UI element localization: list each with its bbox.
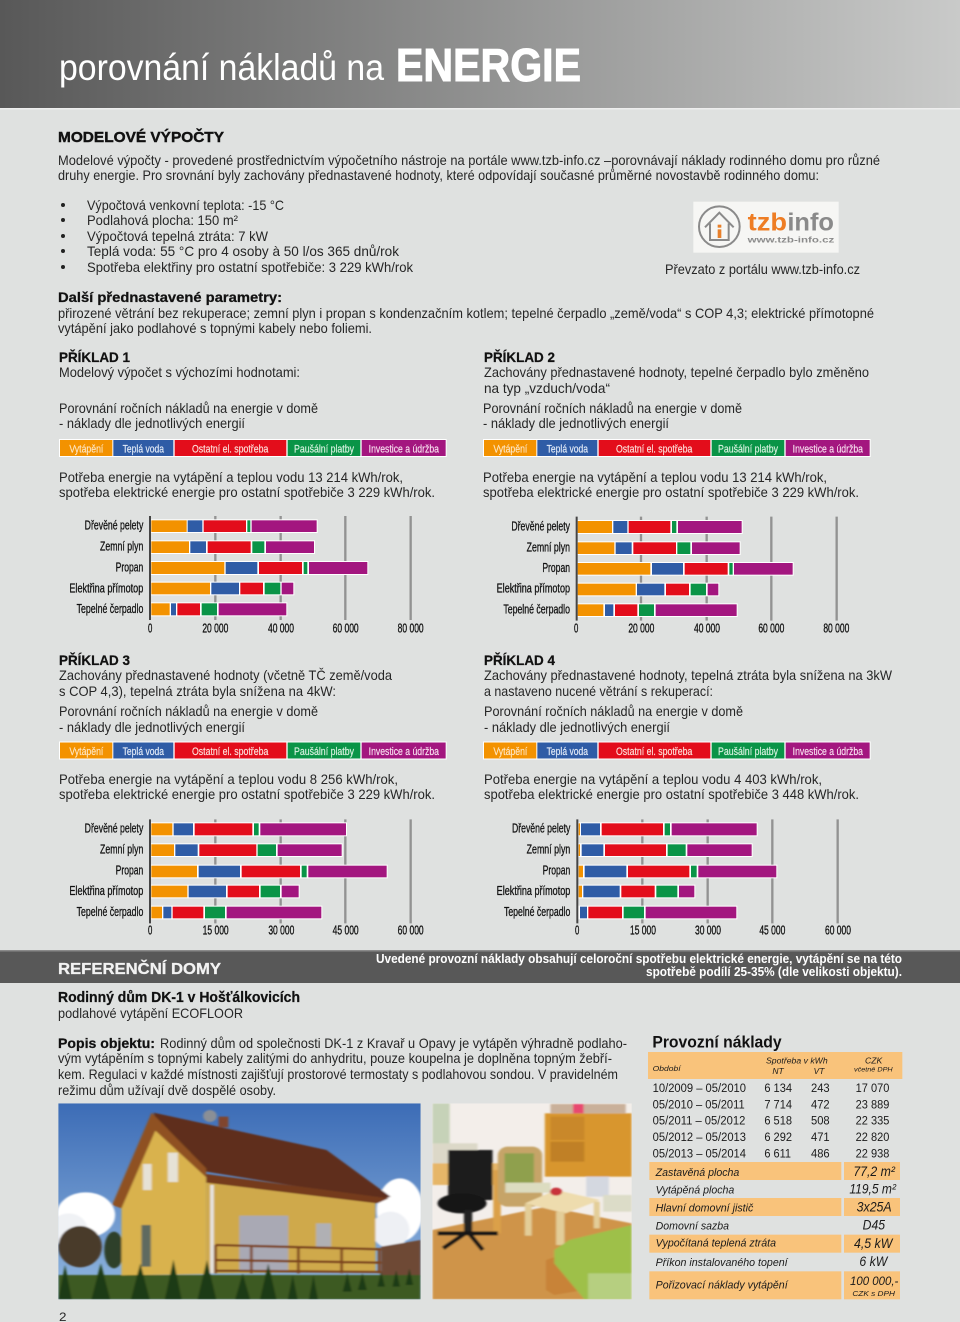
legend example 2 [483, 439, 871, 457]
example 3 text [59, 651, 392, 735]
chart: example 4 [497, 819, 851, 937]
example 2 energy demand: Potřeba energie na vytápění a teplou vodu 13 214 kWh/rok, [483, 469, 827, 485]
table rows: periods: 486 [811, 1147, 830, 1161]
table: house parameters: Vytápěná plocha [656, 1185, 734, 1197]
table rows: periods: 22 938 [856, 1147, 889, 1161]
example 3 energy demand: spotřeba elektrické energie pro ostatní spotřebiče 3 229 kWh/rok. [59, 786, 435, 802]
example 4 energy demand: Potřeba energie na vytápění a teplou vodu 4 403 kWh/rok, [484, 771, 822, 787]
bar: Propan [151, 865, 388, 878]
house title [58, 990, 300, 1021]
axis values: 30 000 [695, 923, 721, 937]
logo: tzb-info: info [787, 209, 834, 237]
table rows: periods: 472 [811, 1097, 830, 1111]
heading: modelové výpočty: MODELOVÉ VÝPOČTY [58, 128, 224, 146]
object description: Rodinný dům od společnosti DK-1 z Kravař u Opavy je vytápěn výhradně podlaho- [160, 1035, 627, 1051]
category labels: Tepelné čerpadlo [503, 601, 570, 616]
example 1 energy demand [59, 469, 435, 500]
object description: režimu dům užívají dvě dospělé osoby. [58, 1082, 276, 1098]
further parameters: vytápění jako podlahové s topnými kabely nebo foliemi. [58, 320, 372, 336]
example 4 text: Porovnání ročních nákladů na energie v domě [484, 703, 743, 719]
legend example 2: Paušální platby [718, 444, 778, 456]
legend example 4: Vytápění [493, 746, 527, 758]
axis values: 60 000 [398, 923, 424, 937]
logo: tzb-info [693, 202, 839, 253]
category labels: Zemní plyn [527, 539, 570, 554]
axis values: 30 000 [268, 923, 294, 937]
table rows: periods: 508 [811, 1114, 830, 1128]
category labels: Dřevěné pelety [85, 821, 144, 836]
table: house parameters: Pořizovací náklady vytápění [656, 1280, 789, 1292]
object description [58, 1035, 627, 1098]
table rows: periods: 22 335 [856, 1114, 889, 1128]
object description: kem. Regulaci v každé místnosti zajišťují prostorové termostaty s podlahovou sondou. V pravidelném [58, 1066, 618, 1082]
example 3 energy demand: Potřeba energie na vytápění a teplou vodu 8 256 kWh/rok, [59, 771, 398, 787]
header banner [0, 0, 960, 110]
example 1 text: Modelový výpočet s výchozími hodnotami: [59, 364, 300, 380]
note on operating costs: Uvedené provozní náklady obsahují celoroční spotřebu elektrické energie, vytápění se na této [376, 952, 902, 966]
legend example 1: Investice a údržba [369, 444, 440, 456]
table header: CZK [865, 1055, 883, 1065]
table rows: periods: 10/2009 – 05/2010 [653, 1081, 746, 1095]
axis values: 60 000 [758, 622, 784, 636]
bullet list of parameters: Podlahová plocha: 150 m² [87, 212, 238, 228]
example 2 text: na typ „vzduch/voda“ [484, 380, 610, 396]
table rows: periods: 6 518 [764, 1114, 792, 1128]
axis values: 15 000 [203, 923, 229, 937]
legend example 1: Vytápění [69, 444, 103, 456]
chart: example 2 [497, 517, 849, 636]
table header: včetně DPH [854, 1067, 893, 1074]
table: house parameters: 77,2 m² [853, 1164, 895, 1179]
legend example 2: Ostatní el. spotřeba [616, 444, 693, 456]
axis values: 20 000 [628, 622, 654, 636]
category labels: Dřevěné pelety [512, 821, 571, 836]
example 1 text: PŘÍKLAD 1 [59, 348, 130, 365]
photo: house exterior [50, 1103, 423, 1299]
band: reference houses [0, 950, 960, 983]
example 4 text [484, 651, 893, 735]
table rows: periods: 17 070 [856, 1081, 889, 1095]
bullet list of parameters: Výpočtová venkovní teplota: -15 °C [87, 197, 284, 213]
bar: Elektřina přímotop [151, 885, 300, 898]
category labels [69, 821, 144, 919]
logo: tzb-info: www.tzb-info.cz [746, 234, 834, 244]
category labels: Propan [116, 862, 143, 877]
example 4 text: a nastaveno nucené větrání s rekuperací: [484, 683, 713, 699]
table rows: periods: 6 292 [764, 1130, 792, 1144]
table: house parameters: 3x25A [857, 1199, 892, 1214]
table: house parameters: 100 000,- [850, 1274, 898, 1288]
example 4 energy demand [484, 771, 859, 802]
example 3 text: PŘÍKLAD 3 [59, 651, 130, 668]
table rows: periods: 05/2010 – 05/2011 [653, 1097, 745, 1111]
table: house parameters: Domovní sazba [656, 1220, 729, 1232]
table header: NT [772, 1066, 785, 1076]
axis values [148, 923, 424, 937]
further parameters: přirozené větrání bez rekuperace; zemní plyn i propan s kondenzačním kotlem; tepelné čerpadlo „země/voda“ s COP 4,3; elektrické přímotopné [58, 305, 874, 321]
category labels: Zemní plyn [100, 841, 143, 856]
further parameters [58, 289, 874, 336]
legend example 3: Investice a údržba [369, 746, 440, 758]
legend example 1: Paušální platby [294, 444, 354, 456]
category labels: Tepelné čerpadlo [504, 904, 570, 919]
category labels: Elektřina přímotop [497, 883, 570, 898]
example 2 text: - náklady dle jednotlivých energií [483, 415, 669, 431]
table header: VT [814, 1066, 825, 1076]
legend example 3: Vytápění [69, 746, 103, 758]
axis values: 40 000 [268, 621, 294, 635]
bar: Elektřina přímotop [577, 583, 719, 596]
legend example 4: Teplá voda [547, 746, 589, 758]
example 1 energy demand: Potřeba energie na vytápění a teplou vodu 13 214 kWh/rok, [59, 469, 403, 485]
table: house parameters: Vypočítaná teplená ztráta [656, 1238, 776, 1250]
table rows: periods: 6 134 [764, 1081, 792, 1095]
bar: Propan [578, 865, 777, 878]
example 2 text: PŘÍKLAD 2 [484, 348, 555, 365]
table title: Provozní náklady [652, 1032, 782, 1051]
category labels: Zemní plyn [527, 841, 570, 856]
note on operating costs: spotřebě podílí 25-35% (dle velikosti objektu). [646, 965, 902, 979]
table: house parameters: D45 [863, 1217, 885, 1232]
category labels: Elektřina přímotop [69, 883, 143, 898]
axis values: 80 000 [823, 622, 849, 636]
logo: tzb-info: tzb [748, 209, 787, 237]
bar: Propan [577, 562, 794, 576]
panel: operating costs table [648, 1032, 902, 1299]
example 1 text [59, 348, 318, 431]
axis values: 20 000 [202, 621, 228, 635]
table rows: periods: 22 820 [856, 1130, 889, 1144]
category labels: Propan [116, 560, 143, 575]
table rows: periods: 243 [811, 1081, 830, 1095]
legend example 4: Ostatní el. spotřeba [616, 746, 693, 758]
category labels: Tepelné čerpadlo [77, 601, 143, 616]
category labels: Elektřina přímotop [497, 581, 570, 596]
table: house parameters: CZK s DPH [852, 1289, 896, 1298]
bullet list of parameters: Teplá voda: 55 °C pro 4 osoby à 50 l/os 365 dnů/rok [87, 243, 400, 259]
example 1 energy demand: spotřeba elektrické energie pro ostatní spotřebiče 3 229 kWh/rok. [59, 484, 435, 500]
table: house parameters: Příkon instalovaného topení [656, 1257, 789, 1269]
bar: Zemní plyn [151, 843, 343, 857]
category labels [69, 518, 144, 616]
legend example 4 [483, 741, 871, 759]
example 1 text: Porovnání ročních nákladů na energie v domě [59, 400, 318, 416]
intro text [58, 152, 880, 183]
axis values [574, 622, 849, 636]
bar: Dřevěné pelety [577, 520, 743, 534]
intro text: druhy energie. Pro srovnání byly zachovány přednastavené hodnoty, které odpovídají současné průměrné novostavbě rodinného domu: [58, 167, 819, 183]
example 2 text: Zachovány přednastavené hodnoty, tepelné čerpadlo bylo změněno [484, 364, 869, 380]
table: house parameters: 119,5 m² [849, 1182, 896, 1197]
table rows: periods: 23 889 [856, 1097, 889, 1111]
axis values: 0 [574, 622, 578, 636]
object description: vým vytápěním s topnými kabely zalitými do anhydritu, pouze koupelna je doplněna topným žebří- [58, 1050, 612, 1066]
axis values: 60 000 [825, 923, 851, 937]
category labels: Tepelné čerpadlo [77, 904, 143, 919]
bar: Elektřina přímotop [151, 582, 294, 595]
example 2 energy demand: spotřeba elektrické energie pro ostatní spotřebiče 3 229 kWh/rok. [483, 484, 859, 500]
table rows: periods: 6 611 [764, 1147, 791, 1161]
logo caption: Převzato z portálu www.tzb-info.cz [665, 261, 860, 277]
example 2 energy demand [483, 469, 859, 500]
legend example 2: Teplá voda [547, 444, 589, 456]
example 3 text: s COP 4,3), tepelná ztráta byla snížena na 4kW: [59, 683, 336, 699]
table header: Spotřeba v kWh [766, 1055, 828, 1065]
legend example 1: Ostatní el. spotřeba [192, 444, 269, 456]
legend example 1: Teplá voda [123, 444, 165, 456]
category labels: Dřevěné pelety [511, 518, 570, 533]
bar: Zemní plyn [577, 541, 741, 555]
legend example 2: Investice a údržba [793, 444, 864, 456]
bar: Dřevěné pelety [151, 822, 347, 836]
category labels: Propan [542, 560, 570, 575]
example 4 text: - náklady dle jednotlivých energií [484, 719, 670, 735]
object description: Popis objektu: [58, 1035, 155, 1051]
note on operating costs [376, 952, 902, 979]
table: house parameters: 4,5 kW [854, 1236, 893, 1251]
axis values: 0 [148, 621, 152, 635]
table: house parameters: 6 kW [859, 1254, 888, 1269]
table: house parameters [649, 1162, 900, 1299]
axis values: 0 [148, 923, 152, 937]
axis values: 45 000 [333, 923, 359, 937]
legend example 3: Teplá voda [123, 746, 165, 758]
category labels: Zemní plyn [100, 539, 143, 554]
legend example 4: Paušální platby [718, 746, 778, 758]
photo: room interior [432, 1103, 632, 1299]
category labels: Propan [543, 862, 570, 877]
table: house parameters: Hlavní domovní jistič [656, 1202, 754, 1214]
bar: Tepelné čerpadlo [577, 603, 738, 617]
axis values: 40 000 [694, 622, 720, 636]
axis values: 15 000 [630, 923, 656, 937]
chart: example 1 [69, 516, 424, 635]
house title: Rodinný dům DK-1 v Hošťálkovicích [58, 990, 300, 1006]
table: house parameters: Zastavěná plocha [655, 1167, 739, 1179]
category labels: Dřevěné pelety [85, 518, 144, 533]
bar: Elektřina přímotop [578, 885, 695, 898]
axis values [575, 923, 851, 937]
example 4 text: Zachovány přednastavené hodnoty, tepelná ztráta byla snížena na 3kW [484, 667, 893, 683]
axis values: 0 [575, 923, 579, 937]
heading: referenční domy: REFERENČNÍ DOMY [58, 959, 221, 978]
title: ENERGIE [396, 39, 581, 91]
table rows: periods: 471 [811, 1130, 830, 1144]
category labels: Elektřina přímotop [69, 580, 143, 595]
legend example 1 [59, 439, 447, 457]
example 1 text: - náklady dle jednotlivých energií [59, 415, 245, 431]
bar: Zemní plyn [578, 843, 753, 857]
bar: Tepelné čerpadlo [578, 906, 737, 919]
example 3 text: Porovnání ročních nákladů na energie v domě [59, 703, 318, 719]
example 3 text: - náklady dle jednotlivých energií [59, 719, 245, 735]
axis values: 80 000 [398, 621, 424, 635]
example 4 energy demand: spotřeba elektrické energie pro ostatní spotřebiče 3 448 kWh/rok. [484, 786, 859, 802]
house title: podlahové vytápění ECOFLOOR [58, 1005, 243, 1021]
bar: Tepelné čerpadlo [151, 602, 287, 616]
table rows: periods [653, 1081, 889, 1161]
axis values: 45 000 [759, 923, 785, 937]
table rows: periods: 7 714 [764, 1097, 792, 1111]
bar: Dřevěné pelety [151, 519, 318, 533]
legend example 2: Vytápění [493, 444, 527, 456]
example 2 text [483, 348, 869, 431]
axis values [148, 621, 424, 635]
title [59, 39, 581, 91]
legend example 3: Ostatní el. spotřeba [192, 746, 269, 758]
table header: Období [653, 1064, 682, 1073]
legend example 3: Paušální platby [294, 746, 354, 758]
bar: Zemní plyn [151, 540, 315, 554]
further parameters: Další přednastavené parametry: [58, 289, 282, 305]
example 4 text: PŘÍKLAD 4 [484, 651, 555, 668]
table rows: periods: 05/2011 – 05/2012 [653, 1114, 745, 1128]
legend example 3 [59, 741, 447, 759]
chart: example 3 [69, 819, 424, 937]
example 3 text: Zachovány přednastavené hodnoty (včetně TČ země/voda [59, 667, 392, 683]
table header [648, 1052, 902, 1079]
table rows: periods: 05/2012 – 05/2013 [653, 1130, 746, 1144]
legend example 4: Investice a údržba [793, 746, 864, 758]
title: porovnání nákladů na [59, 47, 384, 88]
bullet list of parameters [61, 197, 414, 275]
table rows: periods: 05/2013 – 05/2014 [653, 1147, 746, 1161]
category labels [497, 518, 570, 616]
intro text: Modelové výpočty - provedené prostřednictvím výpočetního nástroje na portále www.tzb-info.cz –porovnávají náklady rodinného domu pro různé [58, 152, 880, 168]
example 2 text: Porovnání ročních nákladů na energie v domě [483, 400, 742, 416]
bar: Tepelné čerpadlo [151, 906, 322, 919]
bar: Propan [151, 561, 368, 575]
category labels [497, 821, 571, 919]
bullet list of parameters: Spotřeba elektřiny pro ostatní spotřebiče: 3 229 kWh/rok [87, 259, 414, 275]
bar: Dřevěné pelety [578, 822, 758, 836]
axis values: 60 000 [333, 621, 359, 635]
bullet list of parameters: Výpočtová tepelná ztráta: 7 kW [87, 228, 269, 244]
example 3 energy demand [59, 771, 435, 802]
